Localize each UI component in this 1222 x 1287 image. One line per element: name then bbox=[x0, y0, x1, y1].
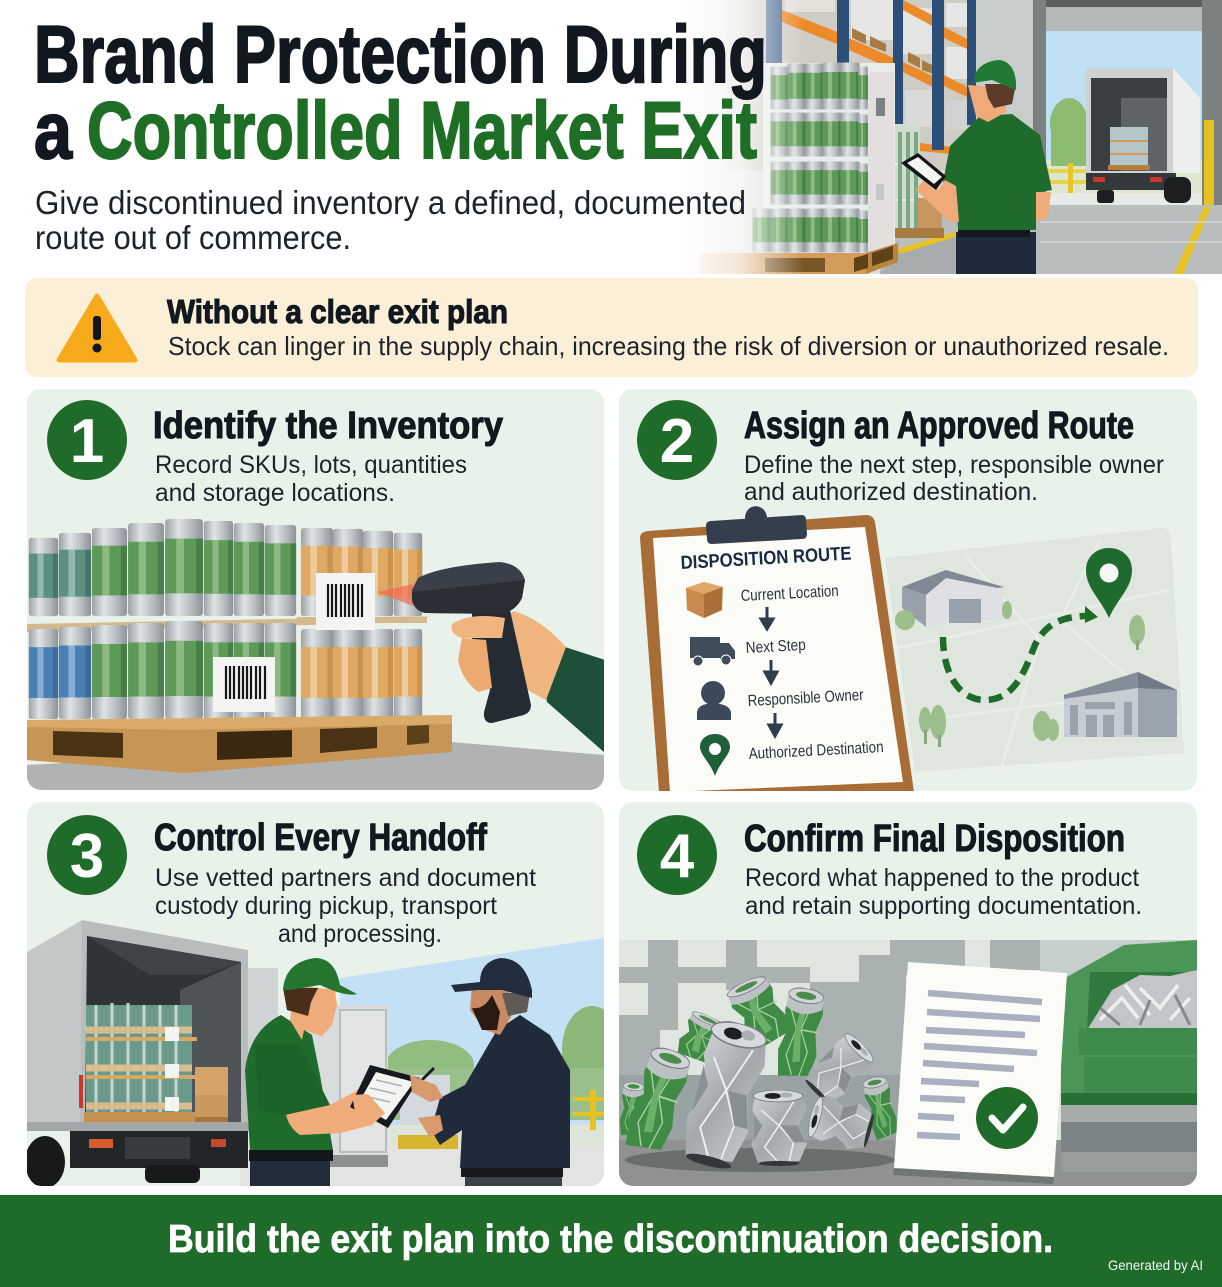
side pallet and boxes bbox=[894, 124, 944, 238]
can stacks bbox=[27, 519, 430, 719]
body text: Record SKUs, lots, quantities bbox=[155, 451, 467, 479]
worker in green uniform bbox=[245, 958, 385, 1190]
step: authorized destination bbox=[700, 734, 884, 776]
clipboard: disposition route: DISPOSITION ROUTE bbox=[680, 543, 852, 574]
scan beam bbox=[377, 584, 413, 606]
footer banner bbox=[0, 1195, 1222, 1287]
step: responsible owner: Responsible Owner bbox=[747, 687, 865, 710]
panel: step 1 identify the inventory bbox=[27, 389, 605, 790]
number badge 2 bbox=[637, 400, 717, 480]
number badge 4: 4 bbox=[660, 822, 695, 891]
barcode labels bbox=[213, 573, 375, 712]
clipboard: disposition route bbox=[640, 506, 914, 792]
body text bbox=[744, 451, 1164, 506]
white fade over hero left edge bbox=[676, 0, 804, 274]
worker in navy jacket bbox=[410, 958, 570, 1190]
dashed route arrow bbox=[943, 606, 1098, 700]
title: a bbox=[34, 86, 73, 176]
warehouse racking bbox=[756, 0, 976, 170]
wooden pallet bbox=[27, 715, 452, 773]
clipboard being signed bbox=[350, 1065, 434, 1128]
number badge 4 bbox=[637, 815, 717, 895]
step: current location: Current Location bbox=[740, 583, 839, 605]
title: Controlled Market Exit bbox=[87, 86, 757, 176]
body text bbox=[155, 451, 467, 507]
body text bbox=[745, 864, 1142, 920]
green recycling bin with scrap bbox=[1061, 940, 1197, 1172]
illustration: pallet being scanned bbox=[27, 519, 605, 790]
body text: and storage locations. bbox=[155, 479, 395, 507]
subtitle bbox=[35, 184, 746, 256]
trees bbox=[919, 615, 1145, 747]
number badge 3 bbox=[47, 815, 127, 895]
panel: step 2 assign an approved route bbox=[619, 389, 1197, 792]
panel: step 4 confirm final disposition bbox=[618, 802, 1197, 1190]
generated by note: Generated by AI bbox=[1108, 1257, 1203, 1273]
distribution building bbox=[1064, 672, 1177, 737]
pallet of green cans in shrink wrap bbox=[700, 62, 898, 274]
document with check mark bbox=[893, 962, 1067, 1184]
title bbox=[34, 10, 767, 176]
map with route bbox=[640, 506, 1184, 792]
worker with tablet bbox=[901, 60, 1052, 274]
warning banner bbox=[25, 278, 1198, 377]
icon: destination pin bbox=[1086, 548, 1132, 618]
step: next step bbox=[690, 637, 806, 683]
dock door and sky bbox=[1033, 0, 1222, 215]
body text: custody during pickup, transport bbox=[155, 892, 497, 920]
delivery truck with cargo bbox=[25, 920, 249, 1188]
subtitle: route out of commerce. bbox=[35, 219, 351, 256]
step: current location bbox=[686, 582, 839, 629]
number badge 1: 1 bbox=[70, 407, 104, 476]
heading: Assign an Approved Route bbox=[744, 405, 1134, 447]
illustration: truck handoff bbox=[25, 920, 622, 1190]
warning banner: Without a clear exit plan bbox=[167, 293, 508, 330]
body text bbox=[155, 864, 536, 948]
number badge 2: 2 bbox=[660, 407, 694, 476]
sky and ground bbox=[240, 938, 622, 1187]
title: Brand Protection During bbox=[34, 10, 767, 100]
delivery truck in dock bbox=[1086, 68, 1200, 203]
step: responsible owner bbox=[697, 681, 865, 736]
panel: step 3 control every handoff bbox=[25, 802, 622, 1190]
body text: and processing. bbox=[278, 920, 442, 948]
body text: Define the next step, responsible owner bbox=[744, 451, 1164, 479]
icon: handheld scanner in hand bbox=[412, 562, 605, 753]
body text: Use vetted partners and document bbox=[155, 864, 536, 892]
heading: Identify the Inventory bbox=[153, 405, 503, 447]
subtitle: Give discontinued inventory a defined, documented bbox=[35, 184, 746, 221]
wall bbox=[980, 0, 1033, 130]
icon: check circle bbox=[976, 1087, 1038, 1149]
body text: Record what happened to the product bbox=[745, 864, 1139, 892]
number badge 1 bbox=[47, 400, 127, 480]
crushed can pile bbox=[618, 972, 900, 1173]
step: authorized destination: Authorized Destination bbox=[748, 739, 884, 763]
body text: and authorized destination. bbox=[744, 478, 1038, 506]
footer banner: Build the exit plan into the discontinuation decision. bbox=[168, 1218, 1053, 1261]
illustration: recycled cans and record bbox=[618, 940, 1197, 1190]
cargo pallet bbox=[84, 1003, 228, 1123]
body text: and retain supporting documentation. bbox=[745, 892, 1142, 920]
warehouse building bbox=[895, 570, 1012, 630]
warehouse floor bbox=[880, 205, 1222, 274]
step: next step: Next Step bbox=[745, 637, 806, 657]
heading: Confirm Final Disposition bbox=[744, 818, 1125, 860]
number badge 3: 3 bbox=[70, 822, 104, 891]
icon: warning triangle bbox=[59, 296, 135, 360]
warning banner: Stock can linger in the supply chain, increasing the risk of diversion or unauthorized resale. bbox=[168, 331, 1169, 361]
heading: Control Every Handoff bbox=[154, 817, 487, 859]
parked trailer bbox=[245, 968, 388, 1167]
hero image: warehouse and loading dock bbox=[680, 0, 1222, 274]
